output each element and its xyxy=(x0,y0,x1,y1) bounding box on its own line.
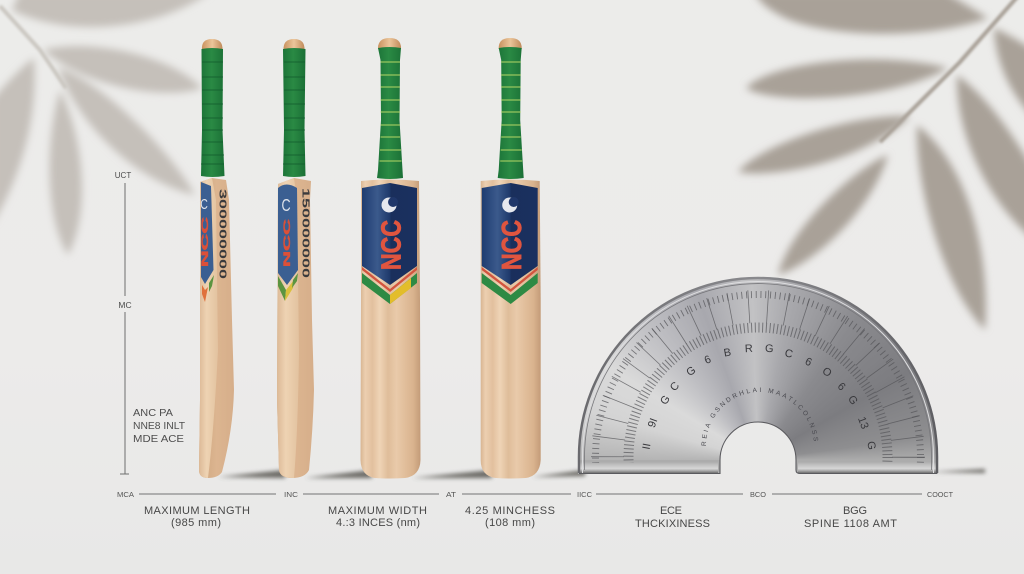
bat 4 sticker: NCC xyxy=(496,220,527,270)
bat 3: front view xyxy=(360,38,420,478)
label: edge thickness: ECE xyxy=(660,505,682,517)
bat 1: side view xyxy=(199,39,234,478)
inner arc caption xyxy=(706,392,814,446)
scale letters: G xyxy=(864,441,878,451)
horizontal baseline: MCA xyxy=(117,490,134,499)
label: maximum width xyxy=(328,505,427,529)
side note: MDE ACE xyxy=(133,433,184,445)
side note: NNE8 INLT xyxy=(133,420,186,432)
vertical length scale: MC xyxy=(118,300,132,310)
protractor gauge xyxy=(578,276,938,474)
label: minchess: 4.25 MINCHESS xyxy=(465,505,555,517)
rim xyxy=(579,278,937,473)
horizontal baseline: BCO xyxy=(750,490,766,499)
label: edge thickness: THCKIXINESS xyxy=(635,518,710,530)
leaf stem: left xyxy=(0,6,66,88)
leaves: top left branch xyxy=(0,0,210,255)
label: maximum width: MAXIMUM WIDTH xyxy=(328,505,427,517)
scale letters: G xyxy=(845,394,860,407)
scale letters: C xyxy=(668,380,682,394)
bat 4 blade xyxy=(481,180,541,478)
label: maximum length: MAXIMUM LENGTH xyxy=(144,505,250,517)
bat 2 handle xyxy=(283,39,306,177)
bat 3 chevron stripes xyxy=(362,273,417,304)
scale letters: 6 xyxy=(703,354,713,367)
label: spine: SPINE 1108 AMT xyxy=(804,518,897,530)
ground shadows xyxy=(218,469,985,478)
bat 1 sticker: C xyxy=(200,195,208,212)
bat 3 blade xyxy=(360,180,420,478)
side note: ANC PA xyxy=(133,407,173,419)
horizontal baseline: INC xyxy=(284,490,299,499)
bat 3 sticker xyxy=(362,183,417,285)
scale letters xyxy=(641,343,878,451)
scale letters: G xyxy=(684,364,698,379)
scale letters: G xyxy=(764,343,774,355)
side note xyxy=(133,407,186,445)
bat 4 handle xyxy=(498,38,524,179)
label: maximum length xyxy=(144,505,250,529)
vertical length scale xyxy=(115,171,132,474)
bat 2 blade xyxy=(277,178,314,478)
horizontal baseline: AT xyxy=(446,490,456,499)
label: maximum length: (985 mm) xyxy=(171,517,221,529)
tick marks xyxy=(591,290,925,463)
scale letters: B xyxy=(723,346,732,360)
bat 4 sticker xyxy=(482,183,538,285)
bat 1 sticker xyxy=(200,182,214,302)
bat 2 sticker: C xyxy=(281,196,291,216)
bat 4 chevron stripes xyxy=(482,273,538,304)
bat 4: front view xyxy=(481,38,541,478)
horizontal baseline xyxy=(117,490,953,499)
base and inner cut-out edge xyxy=(579,422,937,474)
label: edge thickness xyxy=(635,505,710,530)
horizontal baseline: COOCT xyxy=(927,490,953,499)
bat 3 handle xyxy=(377,38,403,179)
scale letters: R xyxy=(745,343,753,355)
label: minchess xyxy=(465,505,555,529)
bottom edge shading xyxy=(580,462,936,473)
label: maximum width: 4.:3 INCES (nm) xyxy=(336,517,420,529)
bat 1 sticker: NCC xyxy=(200,216,210,267)
bat 2: side view xyxy=(277,39,314,478)
bat 2 spine text: 150000000 xyxy=(300,188,310,279)
label: minchess: (108 mm) xyxy=(485,517,535,529)
vertical length scale: UCT xyxy=(115,171,131,180)
bat 3 sticker: NCC xyxy=(376,220,406,270)
scale letters: II xyxy=(641,442,653,451)
protractor gauge: REIA GSNDRHLAI MAATLCOLNSS xyxy=(701,388,818,446)
scale letters: 9I xyxy=(646,417,660,429)
bat 1 handle xyxy=(201,39,224,177)
label: spine xyxy=(804,505,897,530)
bat 1 blade xyxy=(199,178,234,478)
scale letters: G xyxy=(658,393,673,407)
scale letters: 6 xyxy=(835,380,848,393)
scale letters: C xyxy=(783,347,794,361)
scale letters: 6 xyxy=(803,356,814,369)
bat 2 sticker: NCC xyxy=(282,219,293,267)
scale letters: 13 xyxy=(855,415,871,431)
leaf stem: right xyxy=(880,0,1018,142)
bat 1 spine text: 300000000 xyxy=(216,189,228,280)
leaves: top right branch xyxy=(738,0,1024,330)
label: spine: BGG xyxy=(843,505,867,517)
scale letters: O xyxy=(820,365,834,380)
bat 2 sticker xyxy=(278,184,298,301)
horizontal baseline: IICC xyxy=(577,490,593,499)
